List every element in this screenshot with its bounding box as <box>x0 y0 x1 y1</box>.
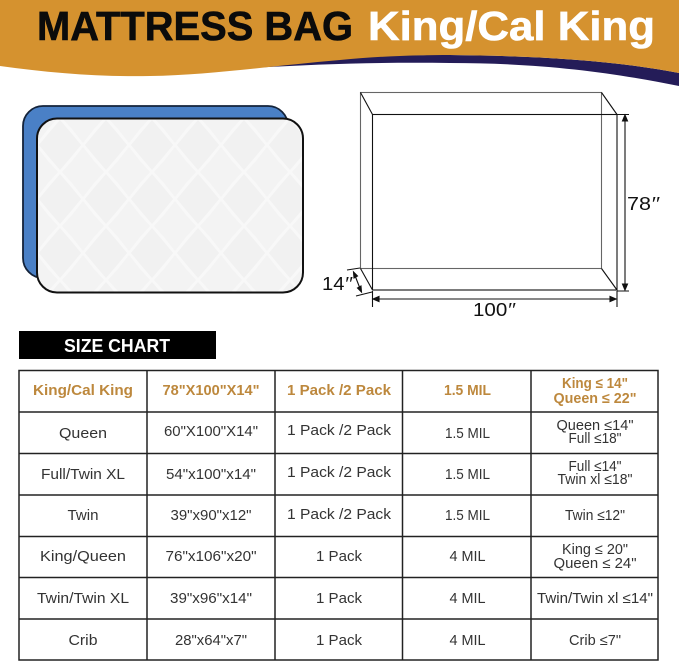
table row: King/Queen <box>40 542 636 572</box>
table header row: Queen ≤ 22" <box>554 391 636 407</box>
table row: Twin: Twin <box>68 508 98 524</box>
table header row: 1 Pack /2 Pack <box>287 383 392 399</box>
table row: Crib <box>68 633 621 649</box>
diagram: bag dimensions <box>322 92 660 320</box>
table row: Crib: 1 Pack <box>316 633 363 649</box>
label: 14 inches: 14′′ <box>322 273 353 294</box>
heading: size chart <box>19 331 216 359</box>
table row: King/Queen: 76"x106"x20" <box>166 549 256 565</box>
table row: Twin/Twin XL: Twin/Twin xl ≤14" <box>537 591 653 607</box>
table header row: 78"X100"X14" <box>162 383 260 399</box>
table row: Full/Twin XL: Twin xl ≤18" <box>558 472 632 488</box>
table row: Full/Twin XL: 1.5 MIL <box>445 467 490 483</box>
table header row <box>33 376 636 407</box>
table row: Queen: 60"X100"X14" <box>164 424 258 440</box>
icon: mattress illustration <box>23 106 303 292</box>
label: 100 inches: 100′′ <box>473 299 516 320</box>
table row: Full/Twin XL: Full/Twin XL <box>41 467 125 483</box>
table row: Crib: 28"x64"x7" <box>175 633 247 649</box>
table row: Twin/Twin XL: 1 Pack <box>316 591 363 607</box>
table row: Twin: 39"x90"x12" <box>170 508 252 524</box>
table row: Queen <box>59 418 634 447</box>
table row: Full/Twin XL: 54"x100"x14" <box>166 467 256 483</box>
title: King/Cal King <box>368 3 655 49</box>
table row: King/Queen: King ≤ 20" <box>562 542 628 558</box>
table row: Twin <box>68 507 625 524</box>
table row: Queen: 1 Pack /2 Pack <box>287 423 392 439</box>
table row: King/Queen: 1 Pack <box>316 549 363 565</box>
table row: Twin/Twin XL <box>37 591 653 607</box>
table row: Full/Twin XL: 1 Pack /2 Pack <box>287 465 392 481</box>
table row: Queen: Queen <box>59 426 107 442</box>
table header row: King ≤ 14" <box>562 376 628 392</box>
14 inch dimension line <box>347 268 372 296</box>
title <box>37 3 655 49</box>
table row: King/Queen: King/Queen <box>40 549 126 565</box>
label: 78 inches: 78′′ <box>627 193 660 214</box>
table row: Full/Twin XL: Full ≤14" <box>568 459 622 475</box>
table header row: 1.5 MIL <box>444 383 491 399</box>
table row: Crib: 4 MIL <box>450 633 486 649</box>
table header row: King/Cal King <box>33 383 133 399</box>
78 inch dimension line <box>617 114 629 291</box>
table row: Queen: Queen ≤14" <box>556 418 634 434</box>
100 inch dimension line <box>372 291 617 307</box>
table row: Twin: Twin ≤12" <box>565 508 625 524</box>
size chart table <box>19 370 658 660</box>
table row: Queen: 1.5 MIL <box>445 426 490 442</box>
table row: Twin/Twin XL: 4 MIL <box>450 591 486 607</box>
table row: Twin/Twin XL: Twin/Twin XL <box>37 591 129 607</box>
table row: Crib: Crib <box>68 633 98 649</box>
table row: Twin: 1.5 MIL <box>445 508 490 524</box>
table row: Twin/Twin XL: 39"x96"x14" <box>170 591 252 607</box>
table row: King/Queen: 4 MIL <box>450 549 486 565</box>
table row: King/Queen: Queen ≤ 24" <box>554 556 636 572</box>
table row: Twin: 1 Pack /2 Pack <box>287 507 392 523</box>
title: MATTRESS BAG <box>37 3 353 49</box>
table row: Crib: Crib ≤7" <box>569 633 621 649</box>
table row: Full/Twin XL <box>41 459 632 488</box>
header banner <box>0 0 679 86</box>
table row: Queen: Full ≤18" <box>568 431 622 447</box>
heading: size chart: SIZE CHART <box>64 336 170 356</box>
